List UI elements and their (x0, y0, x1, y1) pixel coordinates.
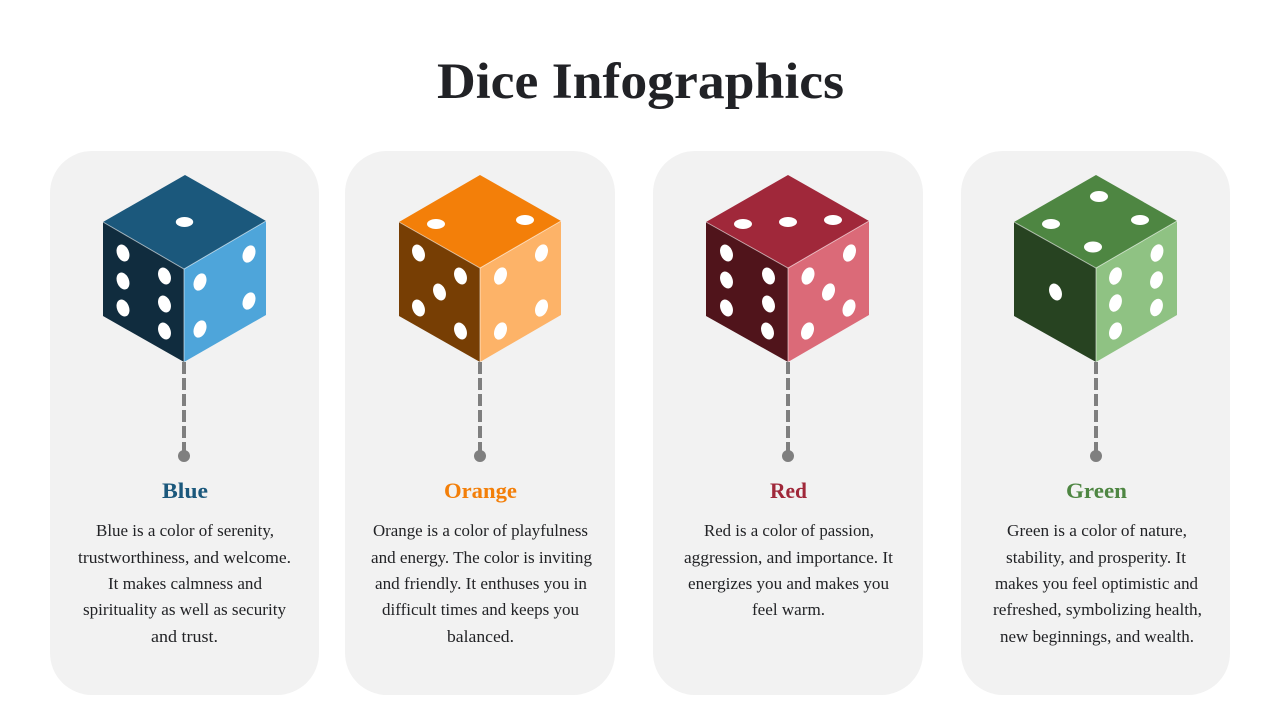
card background: blue (50, 151, 319, 695)
card background: green (961, 151, 1230, 695)
panel: orange (345, 151, 615, 695)
text block: green: makes you feel optimistic and (995, 574, 1199, 593)
connector: blue (178, 362, 190, 462)
connector: red (782, 362, 794, 462)
panel: green (961, 151, 1230, 695)
text block: blue: spirituality as well as security (83, 600, 287, 619)
text block: green: stability, and prosperity. It (1006, 548, 1186, 567)
icon: blue die (103, 175, 266, 362)
text block: orange: balanced. (447, 627, 514, 646)
text block: blue: Blue is a color of serenity, (96, 521, 274, 540)
heading: orange: Orange (444, 478, 517, 503)
title: Dice Infographics (437, 54, 844, 110)
text block: green (993, 521, 1202, 646)
heading: red: Red (770, 478, 807, 503)
icon: red die (706, 175, 869, 362)
text block: blue (78, 521, 291, 646)
text block: orange: and friendly. It enthuses you in (375, 574, 587, 593)
text block: blue: trustworthiness, and welcome. (78, 548, 291, 567)
text block: orange: Orange is a color of playfulness (373, 521, 588, 540)
heading: green: Green (1066, 478, 1127, 503)
card background: red (653, 151, 923, 695)
heading: blue: Blue (162, 478, 208, 503)
text block: red: feel warm. (752, 600, 825, 619)
text block: blue: It makes calmness and (108, 574, 263, 593)
text block: green: refreshed, symbolizing health, (993, 600, 1202, 619)
connector: green (1090, 362, 1102, 462)
icon: orange die (399, 175, 561, 362)
text block: red (684, 521, 893, 619)
icon: green die (1014, 175, 1177, 362)
text block: green: Green is a color of nature, (1007, 521, 1187, 540)
panel: blue (50, 151, 319, 695)
connector: orange (474, 362, 486, 462)
text block: red: energizes you and makes you (688, 574, 889, 593)
text block: red: aggression, and importance. It (684, 548, 893, 567)
panel: red (653, 151, 923, 695)
text block: orange: difficult times and keeps you (382, 600, 579, 619)
text block: red: Red is a color of passion, (704, 521, 874, 540)
text block: green: new beginnings, and wealth. (1000, 627, 1194, 646)
text block: orange (371, 521, 592, 646)
card background: orange (345, 151, 615, 695)
text block: orange: and energy. The color is inviting (371, 548, 592, 567)
text block: blue: and trust. (151, 627, 218, 646)
